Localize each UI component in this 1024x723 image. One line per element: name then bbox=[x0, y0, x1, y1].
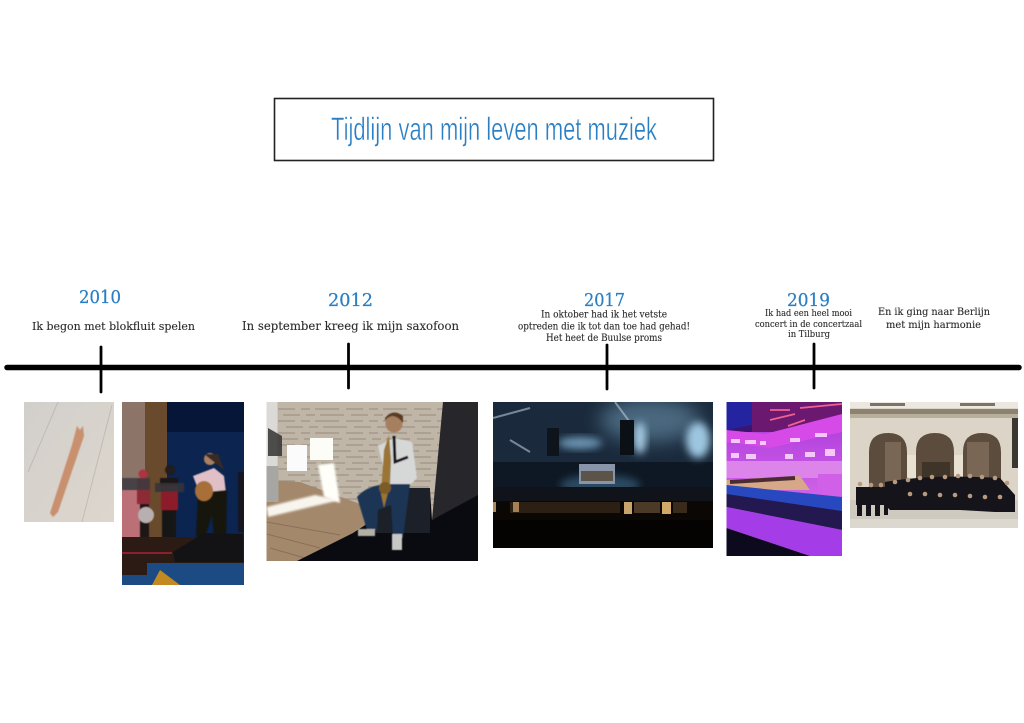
event 2017 text: optreden die ik tot dan toe had gehad! bbox=[518, 322, 690, 332]
event Berlin text: En ik ging naar Berlijn bbox=[878, 306, 990, 318]
event Berlin text: met mijn harmonie bbox=[886, 319, 981, 331]
photo: concert hall Tilburg bbox=[726, 402, 842, 556]
figures bbox=[122, 453, 244, 546]
event 2019 text: concert in de concertzaal bbox=[755, 319, 862, 330]
title: Tijdlijn van mijn leven met muziek bbox=[331, 111, 658, 147]
photo: Buulse proms concert hall bbox=[493, 398, 713, 548]
event 2017 text: 2017 bbox=[584, 291, 625, 311]
event 2017 text: Het heet de Buulse proms bbox=[546, 333, 662, 344]
event 2012 text: In september kreeg ik mijn saxofoon bbox=[242, 318, 459, 333]
event 2019 text: Ik had een heel mooi bbox=[765, 308, 852, 319]
event 2017 text: In oktober had ik het vetste bbox=[541, 310, 667, 320]
event 2010 text bbox=[32, 288, 196, 333]
event 2010 text: Ik begon met blokfluit spelen bbox=[32, 319, 196, 333]
event Berlin text bbox=[878, 306, 990, 331]
photo: performance on stage bbox=[122, 402, 244, 585]
projection screen bbox=[579, 464, 615, 484]
arches bbox=[869, 433, 1001, 490]
event 2012 text bbox=[242, 291, 459, 333]
photo: recorder bbox=[24, 402, 114, 522]
figure bbox=[357, 412, 417, 550]
title box bbox=[274, 98, 714, 160]
photo: orchestra in Berlin bbox=[850, 402, 1018, 528]
band members bbox=[856, 477, 1015, 516]
timeline axis bbox=[7, 344, 1019, 392]
event 2017 text bbox=[518, 291, 690, 344]
event 2012 text: 2012 bbox=[328, 291, 373, 311]
event 2019 text bbox=[755, 291, 862, 340]
event 2019 text: in Tilburg bbox=[788, 329, 830, 340]
event 2019 text: 2019 bbox=[787, 291, 830, 311]
photo: saxophone player bbox=[266, 402, 478, 561]
event 2010 text: 2010 bbox=[79, 288, 121, 308]
